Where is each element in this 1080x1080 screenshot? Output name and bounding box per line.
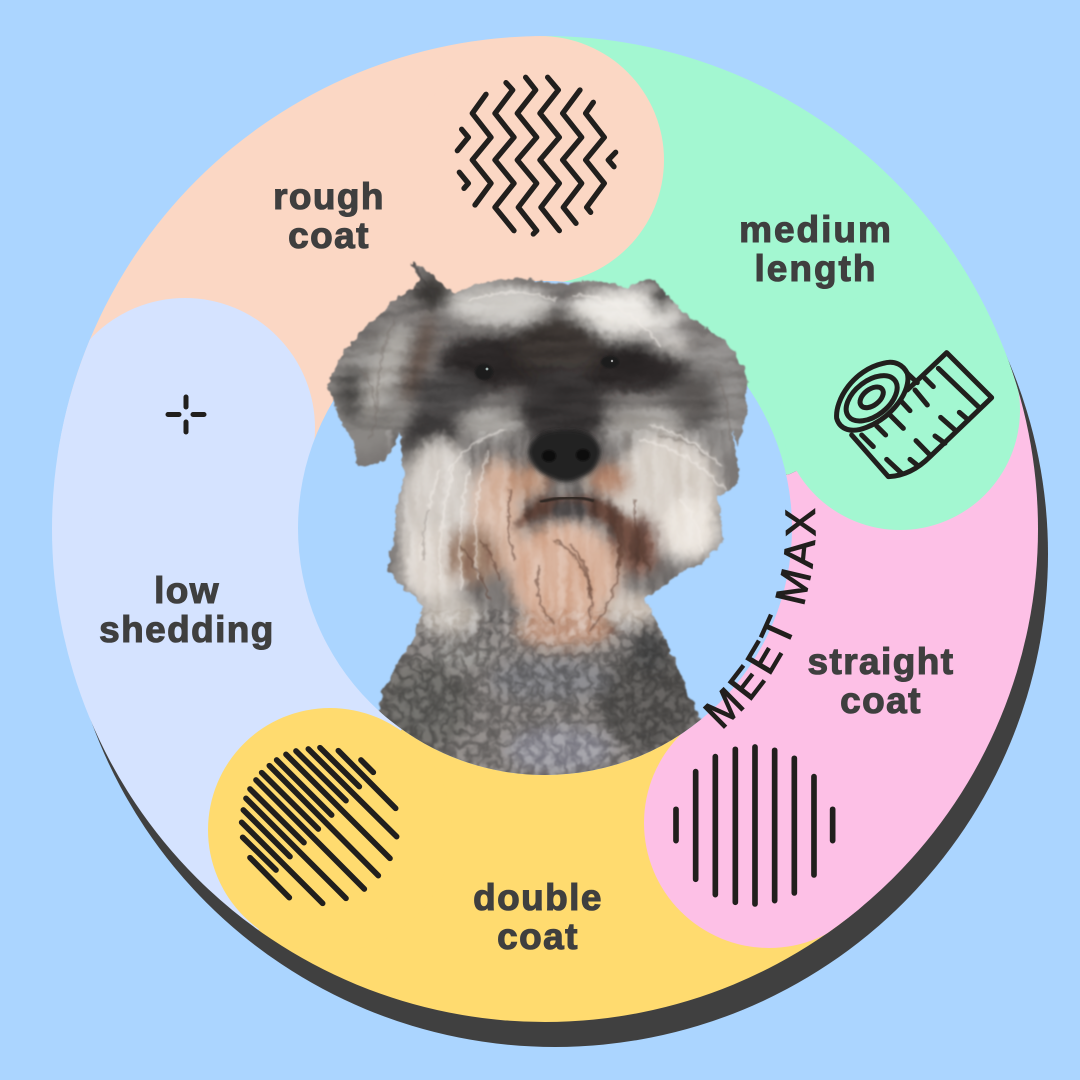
label: rough coat: coat: [288, 215, 370, 256]
segment: low shedding: [52, 396, 402, 930]
label: straight coat: coat: [840, 680, 922, 721]
head: double coat: [208, 708, 401, 930]
segment: medium length: [544, 36, 1012, 475]
label: low shedding: shedding: [99, 609, 275, 650]
icon: straight coat lines: [676, 747, 833, 904]
icon: double coat diagonal lines: [242, 748, 397, 903]
segment: rough coat: [70, 36, 541, 440]
head: low shedding: [58, 298, 315, 462]
icon: low shedding crosshair: [168, 397, 204, 432]
label: medium length: medium: [739, 209, 893, 250]
head: straight coat: [644, 725, 863, 948]
head: medium length: [796, 354, 1020, 530]
mouth shading: [515, 497, 650, 565]
icon: measuring tape: [837, 353, 992, 477]
label: medium length: length: [755, 248, 877, 289]
label: straight coat: straight: [808, 641, 954, 682]
label: double coat: coat: [497, 916, 579, 957]
head: rough coat: [532, 36, 664, 282]
segment: straight coat: [706, 370, 1038, 922]
label: low shedding: low: [154, 570, 220, 611]
segment: double coat: [258, 730, 844, 1022]
centre hole: [298, 281, 792, 775]
whisker fur texture: [385, 430, 730, 635]
icon: zigzag rough coat pattern: [457, 77, 616, 234]
dog face details: [475, 356, 619, 502]
dog photo illustration: [326, 260, 750, 775]
curved title: MEET MAX: MEET MAX: [702, 508, 816, 729]
forehead fur texture: [325, 260, 750, 430]
curly fur texture: [380, 608, 699, 775]
label: rough coat: rough: [273, 176, 385, 217]
label: double coat: double: [473, 877, 603, 918]
